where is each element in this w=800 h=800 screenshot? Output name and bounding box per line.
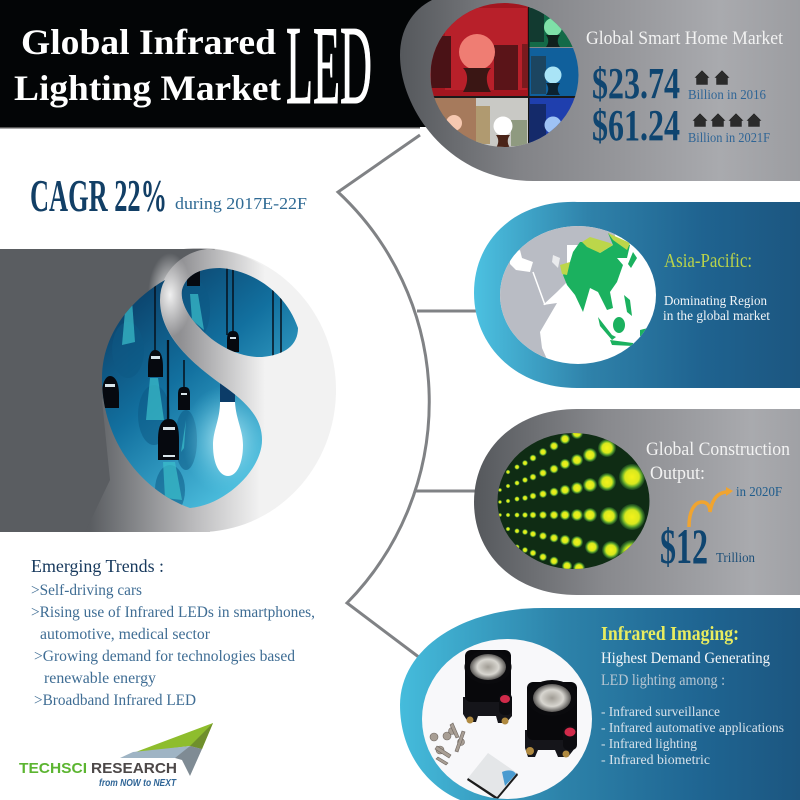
label: in 2020F: in 2020F <box>736 484 782 499</box>
heading: Asia-Pacific: <box>664 250 752 272</box>
icons: houses <box>692 70 762 127</box>
figure 2016: Billion in 2016 <box>688 88 766 103</box>
panel: smart home market <box>400 0 800 181</box>
text block: emerging trends: >Broadband Infrared LED <box>34 692 196 709</box>
panel: Asia-Pacific <box>474 202 800 388</box>
figure: $12 Trillion: $12 <box>660 518 708 574</box>
figure 2016 <box>592 59 766 108</box>
connector lines <box>338 135 478 658</box>
heading: Output: <box>650 463 705 484</box>
figure 2021 <box>592 101 770 150</box>
figure 2021: $61.24 <box>592 101 680 150</box>
text block: emerging trends: automotive, medical sector <box>40 626 211 643</box>
heading <box>646 439 790 484</box>
text block: emerging trends: >Self-driving cars <box>31 582 142 599</box>
application list: - Infrared biometric <box>601 752 710 767</box>
title: Global Infrared <box>21 22 276 62</box>
figure 2016: $23.74 <box>592 59 680 108</box>
logo: TechSci Research <box>19 723 213 789</box>
text: LED <box>286 4 372 128</box>
subheading: LED lighting among : <box>601 672 725 689</box>
heading: Global Construction <box>646 439 790 460</box>
photo: LED wall <box>498 433 650 569</box>
heading: Infrared Imaging: <box>601 623 739 645</box>
CAGR callout: CAGR 22% <box>30 170 167 221</box>
text block: emerging trends: Emerging Trends : <box>31 556 164 576</box>
description: in the global market <box>663 308 770 323</box>
subheading <box>601 650 770 689</box>
text block: emerging trends: renewable energy <box>44 670 156 687</box>
photo: colored smart bulbs <box>430 0 579 148</box>
logo: TechSci Research: RESEARCH <box>91 760 177 777</box>
panel: infrared imaging <box>400 608 800 800</box>
text block: emerging trends: >Growing demand for technologies based <box>34 648 295 665</box>
figure 2021: Billion in 2021F <box>688 131 770 146</box>
arrow: growth <box>689 487 733 527</box>
text block: emerging trends: >Rising use of Infrared LEDs in smartphones, <box>31 604 315 621</box>
subheading: Highest Demand Generating <box>601 650 770 667</box>
photo: hanging bulbs <box>102 268 298 508</box>
logo: TechSci Research: from NOW to NEXT <box>99 778 177 789</box>
panel: construction output <box>474 406 800 595</box>
header band <box>0 0 440 128</box>
heading: Global Smart Home Market <box>586 28 784 49</box>
application list <box>601 704 784 767</box>
title <box>14 4 372 128</box>
figure: $12 Trillion: Trillion <box>716 551 755 566</box>
CAGR callout: during 2017E-22F <box>175 194 307 213</box>
application list: - Infrared automative applications <box>601 720 784 735</box>
panel: hanging bulbs emblem <box>0 248 336 532</box>
description <box>663 293 770 323</box>
map <box>498 224 658 366</box>
logo: TechSci Research: TECHSCI <box>19 760 87 777</box>
photo: infrared modules <box>420 636 595 800</box>
title: Lighting Market <box>14 68 281 108</box>
text block: emerging trends <box>31 556 315 709</box>
application list: - Infrared lighting <box>601 736 697 751</box>
application list: - Infrared surveillance <box>601 704 720 719</box>
description: Dominating Region <box>664 293 767 308</box>
